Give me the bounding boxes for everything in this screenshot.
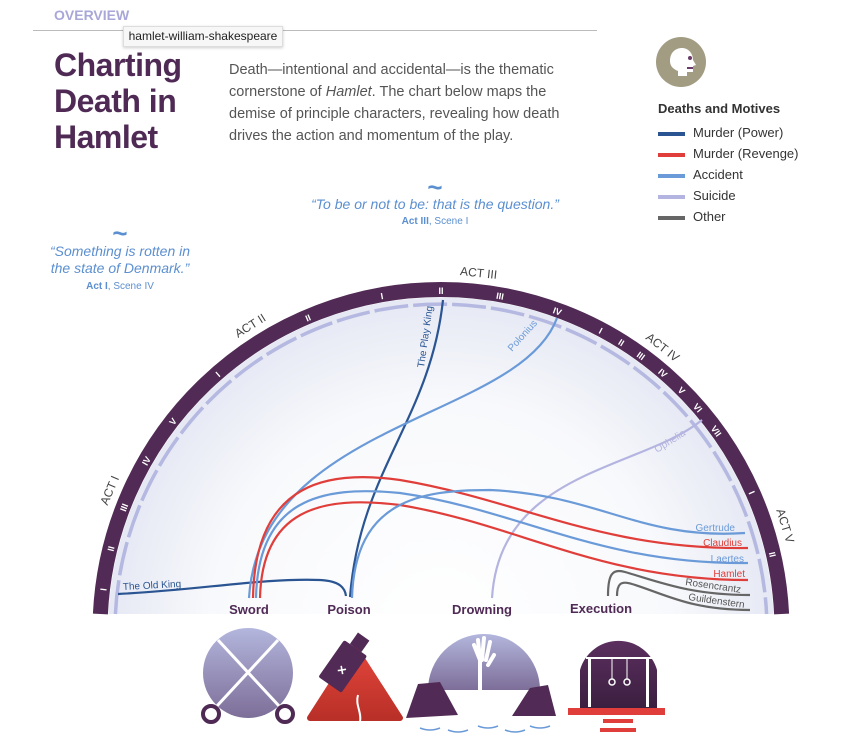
line labels: Gertrude	[696, 523, 735, 534]
line labels: Laertes	[711, 554, 744, 565]
act labels	[97, 264, 797, 545]
ring numerals: IV	[552, 305, 563, 318]
quote: rotten: “Something is rotten in	[50, 243, 190, 259]
ring numerals: V	[676, 385, 687, 396]
title: Hamlet	[54, 119, 158, 155]
header: overview: OVERVIEW	[54, 7, 129, 23]
ring numerals: III	[635, 350, 647, 362]
line labels	[123, 305, 745, 611]
ring numerals: I	[214, 370, 222, 379]
ring numerals: II	[106, 545, 117, 552]
curves	[118, 300, 750, 610]
legend: Accident	[693, 167, 743, 182]
title: Charting	[54, 47, 182, 83]
legend	[658, 101, 798, 224]
act labels: ACT II	[232, 311, 268, 341]
title: Death in	[54, 83, 176, 119]
ring numerals: IV	[656, 367, 669, 380]
ring	[100, 290, 782, 614]
tooltip	[123, 26, 283, 47]
quote: to be: “To be or not to be: that is the question.”	[311, 196, 559, 212]
legend: Other	[693, 209, 726, 224]
ring numerals: II	[767, 551, 778, 558]
icon: skull	[656, 37, 706, 87]
ring numerals: V	[167, 416, 179, 427]
line labels: Polonius	[506, 318, 540, 354]
category labels	[229, 601, 632, 617]
quote: rotten: the state of Denmark.”	[51, 260, 189, 276]
category labels: Sword	[229, 602, 269, 617]
ring numerals: III	[118, 502, 130, 513]
quote: to be: Act III, Scene I	[402, 216, 468, 227]
icon: sword	[203, 628, 293, 722]
act labels: ACT I	[97, 474, 122, 507]
ring numerals: II	[438, 286, 444, 296]
tooltip: hamlet-william-shakespeare	[129, 29, 277, 43]
legend: Murder (Power)	[693, 125, 783, 140]
line labels: The Old King	[123, 579, 181, 593]
legend: Murder (Revenge)	[693, 146, 798, 161]
ring numerals: VI	[691, 401, 704, 414]
category labels: Execution	[570, 601, 632, 616]
line labels: Rosencrantz	[685, 577, 742, 596]
icon: drowning	[406, 634, 556, 732]
line labels: Guildenstern	[688, 592, 745, 611]
quote: to be: ~	[427, 172, 443, 202]
quote: rotten: ~	[112, 218, 128, 248]
line labels: Ophelia	[653, 428, 688, 456]
ring numerals: I	[380, 291, 384, 301]
ring numerals: I	[98, 588, 109, 591]
quote: to be	[311, 172, 560, 227]
intro text: Death—intentional and accidental—is the thematic cornerstone of Hamlet. The chart below maps the demise of principle characters, revealing how death drives the action and momentum of the play.	[229, 62, 559, 144]
icon: poison	[310, 629, 400, 722]
ring numerals: II	[616, 337, 626, 348]
line labels: Claudius	[703, 538, 742, 549]
ring numerals: II	[304, 312, 312, 324]
quote: rotten: Act I, Scene IV	[86, 281, 154, 292]
act labels: ACT IV	[643, 330, 682, 365]
category labels: Poison	[327, 602, 371, 617]
legend: Suicide	[693, 188, 736, 203]
line labels: Hamlet	[713, 569, 745, 580]
icon: execution	[568, 641, 665, 732]
ring numerals: VII	[709, 424, 723, 439]
ring numerals: I	[597, 326, 604, 336]
icon: poison: ×	[333, 662, 351, 678]
legend: Deaths and Motives	[658, 101, 780, 116]
ring numerals: III	[495, 291, 505, 302]
category labels: Drowning	[452, 602, 512, 617]
title	[54, 47, 182, 155]
line labels: The Play King	[416, 305, 436, 368]
quote: rotten	[50, 218, 190, 292]
act labels: ACT III	[459, 264, 498, 282]
ring numerals: I	[747, 490, 757, 496]
ring numerals: IV	[140, 455, 153, 467]
act labels: ACT V	[773, 507, 797, 545]
ring numerals	[98, 286, 778, 591]
